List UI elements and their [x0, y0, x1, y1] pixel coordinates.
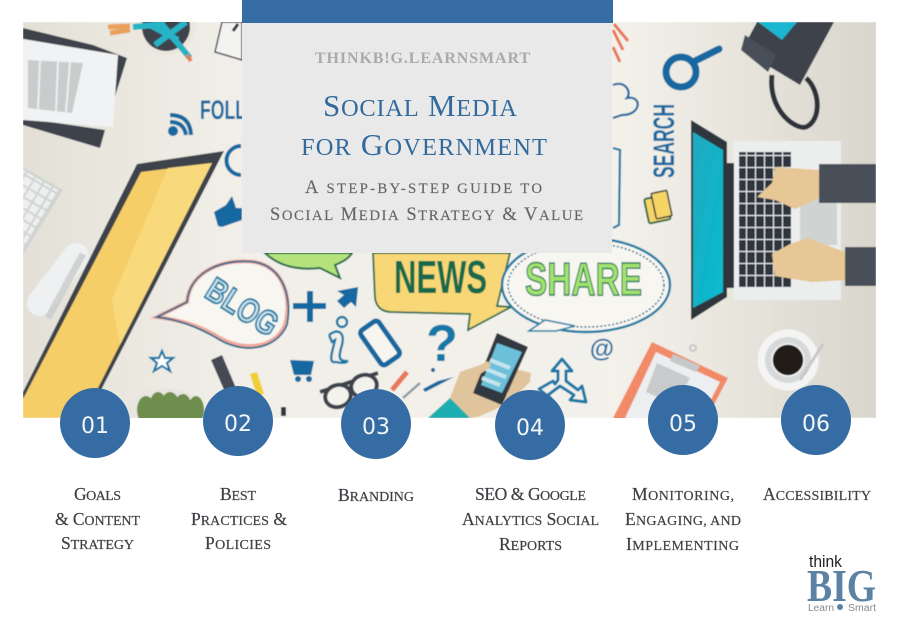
step 6 [763, 385, 871, 504]
wifi and frame fragments [613, 148, 620, 228]
blue laptop [691, 120, 841, 320]
icon: at sign: @ [590, 335, 614, 363]
icon: cart [290, 360, 314, 382]
documents on desk [23, 28, 127, 148]
label 6: ACCESSIBILITY [763, 484, 871, 504]
typing hands [757, 164, 876, 286]
icon: folder [643, 190, 673, 224]
subtitle: SOCIAL MEDIA STRATEGY & VALUE [270, 205, 583, 225]
title [301, 88, 547, 162]
step 1: 01 [81, 414, 109, 439]
icon: three arrows [539, 359, 586, 402]
label 5 [625, 484, 741, 554]
brand line: THINKB!G.LEARNSMART [315, 50, 530, 67]
glasses [320, 372, 380, 410]
icon: thumbs up [214, 196, 242, 227]
orange clipboard [613, 342, 728, 450]
desk tools [211, 355, 286, 416]
label 4 [462, 484, 599, 554]
text: follow: FOLL [200, 95, 246, 125]
label 5: MONITORING, [632, 484, 734, 504]
logo: think big [807, 552, 876, 614]
logo: think big: BIG [807, 560, 876, 611]
icon: star [151, 351, 173, 371]
bubble: news [373, 251, 511, 330]
panel top bar [242, 0, 613, 23]
title: FOR GOVERNMENT [301, 127, 547, 162]
hand holding phone [428, 333, 531, 418]
subtitle: A STEP-BY-STEP GUIDE TO [305, 178, 542, 198]
label 5: ENGAGING, AND [625, 509, 741, 529]
icon: plus [293, 291, 326, 322]
step 6: 06 [802, 412, 830, 437]
title panel [242, 0, 613, 253]
icon: magnifier [666, 49, 719, 87]
label 1 [55, 484, 140, 553]
step 2 [191, 386, 287, 553]
mouse pad [40, 254, 83, 318]
coffee cup [757, 329, 823, 391]
icon: rss [170, 115, 191, 135]
label 4: REPORTS [499, 534, 562, 554]
label 3: BRANDING [338, 485, 414, 505]
step 4 [462, 390, 599, 554]
green bubble [265, 253, 352, 278]
step 3: 03 [362, 415, 390, 440]
bubble: blog [157, 261, 288, 348]
plant [130, 391, 205, 418]
step 1 [55, 388, 140, 553]
logo: think big: Learn [808, 603, 834, 614]
bubble: share [502, 238, 670, 332]
label 1: & CONTENT [55, 509, 140, 529]
icon: info i [329, 317, 348, 363]
icon: question mark: ? [426, 315, 458, 373]
label 1: GOALS [74, 484, 121, 504]
clipboard top [215, 22, 242, 60]
step 2: 02 [224, 412, 252, 437]
label 2: PRACTICES & [191, 509, 287, 529]
label 5: IMPLEMENTING [626, 534, 739, 554]
subtitle [270, 178, 583, 225]
bubble: news: NEWS [394, 251, 487, 303]
label 2: POLICIES [205, 533, 271, 553]
bubble: blog: BLOG [199, 271, 285, 344]
step 4: 04 [516, 416, 544, 441]
logo: think big: think [809, 552, 842, 571]
desk phone [741, 22, 834, 127]
step 3 [338, 389, 414, 505]
title: SOCIAL MEDIA [323, 88, 517, 123]
icon: cloud [613, 84, 638, 118]
logo: think big: Smart [848, 603, 876, 614]
label 1: STRATEGY [61, 533, 134, 553]
left keyboard [23, 167, 63, 255]
step 5: 05 [669, 412, 697, 437]
label 2: BEST [220, 484, 256, 504]
label 2 [191, 484, 287, 553]
pencils near panel [613, 24, 628, 62]
icon: mobile [359, 319, 401, 367]
bubble: share: SHARE [525, 253, 642, 305]
label 4: ANALYTICS SOCIAL [462, 509, 599, 529]
step 5 [625, 385, 741, 554]
label 4: SEO & GOOGLE [475, 484, 586, 504]
yellow laptop [23, 151, 224, 418]
hero illustration: desk scene [23, 22, 876, 418]
icon: circle fragment [226, 146, 241, 175]
icon: arrow [337, 287, 358, 308]
pens [392, 368, 454, 398]
pencil holder [107, 22, 196, 62]
text: search: SEARCH [648, 104, 681, 178]
